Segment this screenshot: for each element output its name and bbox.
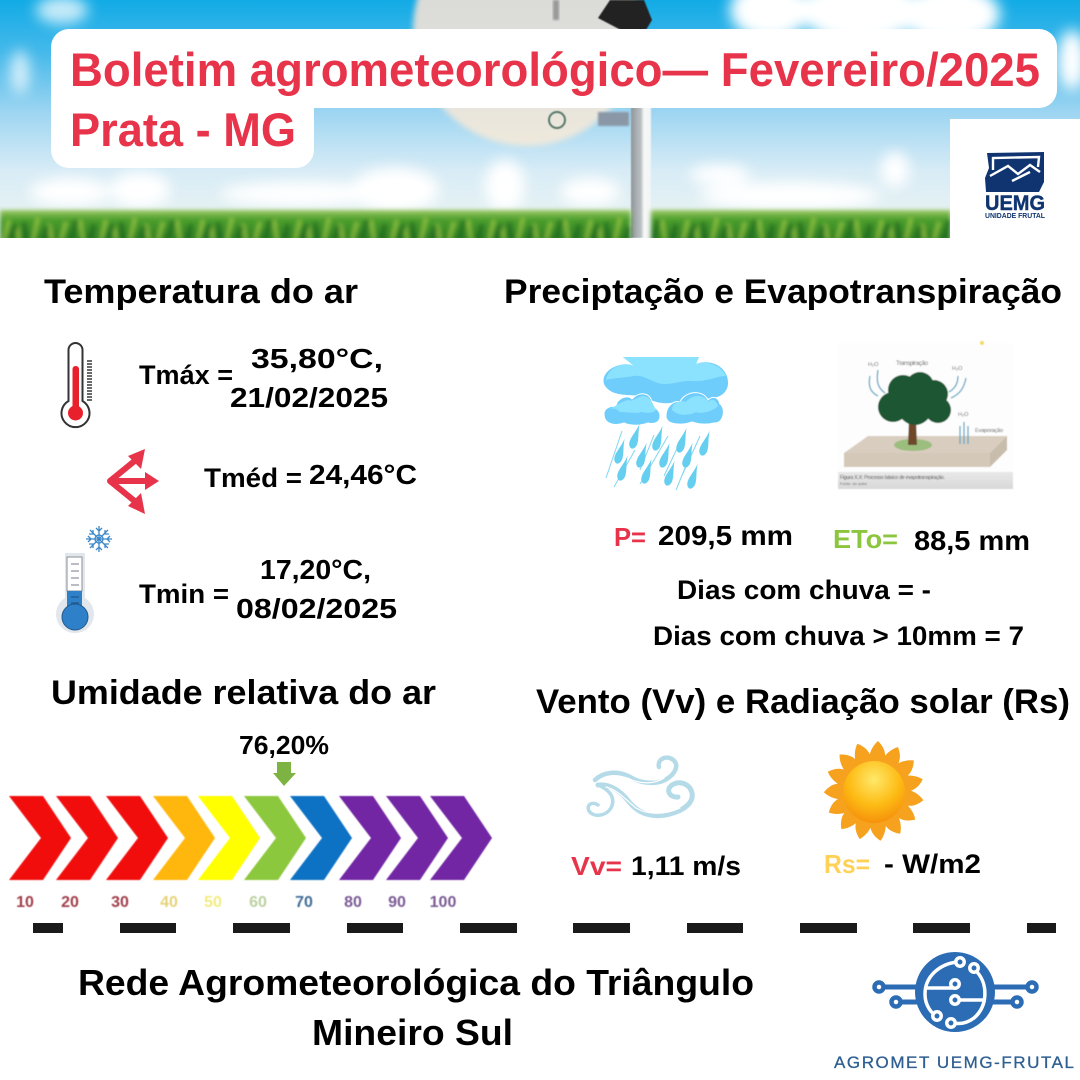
title xyxy=(51,29,1057,168)
text: days with rain: Dias com chuva = - xyxy=(677,575,931,605)
chart: humidity chevron scale: 100 xyxy=(430,894,456,911)
icon: evapotranspiration diagram: Transpiração xyxy=(896,361,929,367)
icon: three red arrows xyxy=(110,449,159,514)
value: tmax: 21/02/2025 xyxy=(230,382,388,413)
chart: humidity chevron scale: 40 xyxy=(160,894,178,911)
value: tmin: 17,20°C, xyxy=(260,554,371,585)
icon: evapotranspiration diagram: Fonte: do autor xyxy=(840,481,868,486)
value: tmin xyxy=(236,554,397,624)
title: Boletim agrometeorológico— Fevereiro/2025 xyxy=(70,43,1040,96)
icon: snowflake xyxy=(86,526,112,552)
heading: vento e radiação solar: Vento (Vv) e Radiação solar (Rs) xyxy=(536,683,1070,721)
logo: UEMG Unidade Frutal: UNIDADE FRUTAL xyxy=(985,213,1046,220)
value: wind speed xyxy=(571,851,741,881)
heading: precipitação e evapotranspiração: Preciptação e Evapotranspiração xyxy=(504,273,1062,311)
icon: green down arrow xyxy=(273,762,296,786)
value: precipitation: 209,5 mm xyxy=(658,520,793,551)
value: tmax: 35,80°C, xyxy=(251,343,383,374)
icon: evapotranspiration diagram: Evaporação xyxy=(975,428,1003,434)
icon: wind xyxy=(588,758,692,816)
logo: Agromet UEMG-Frutal: AGROMET UEMG-FRUTAL xyxy=(834,1053,1074,1072)
text: days with rain over 10 mm: Dias com chuva > 10mm = 7 xyxy=(653,621,1024,651)
chart: humidity chevron scale: 30 xyxy=(111,894,129,911)
chart: humidity chevron scale: 10 xyxy=(16,894,34,911)
heading: umidade relativa do ar: Umidade relativa do ar xyxy=(51,674,436,712)
icon: evapotranspiration diagram: H₂O xyxy=(952,366,963,372)
footer: network name: Rede Agrometeorológica do Triângulo xyxy=(78,962,754,1003)
value: relative humidity: 76,20% xyxy=(239,730,329,760)
icon: hot thermometer xyxy=(62,343,92,427)
icon: cold thermometer xyxy=(56,553,94,633)
value: solar radiation: - W/m2 xyxy=(884,849,981,879)
chart: humidity chevron scale: 90 xyxy=(388,894,406,911)
logo: UEMG Unidade Frutal: UEMG xyxy=(985,192,1045,215)
label: tmed: Tméd = xyxy=(204,463,302,493)
value: wind speed: Vv= xyxy=(571,851,622,881)
value: precipitation: P= xyxy=(614,522,646,552)
value: tmin: 08/02/2025 xyxy=(236,593,397,624)
value: evapotranspiration xyxy=(833,524,1030,556)
heading: temperatura do ar: Temperatura do ar xyxy=(44,273,358,311)
title: Prata - MG xyxy=(70,103,296,156)
icon: sun xyxy=(823,741,925,842)
label: tmin: Tmin = xyxy=(139,579,229,609)
value: tmax xyxy=(230,343,388,413)
value: evapotranspiration: 88,5 mm xyxy=(914,525,1030,556)
logo: Agromet UEMG-Frutal xyxy=(834,952,1074,1072)
value: wind speed: 1,11 m/s xyxy=(631,851,741,881)
chart: humidity chevron scale: 60 xyxy=(249,894,267,911)
label: tmax: Tmáx = xyxy=(139,360,233,390)
value: precipitation xyxy=(614,520,793,552)
icon: evapotranspiration diagram xyxy=(838,341,1013,489)
icon: evapotranspiration diagram: H₂O xyxy=(868,362,879,368)
icon: evapotranspiration diagram: H₂O xyxy=(958,412,969,418)
icon: rain cloud xyxy=(604,357,728,490)
chart: humidity chevron scale: 70 xyxy=(295,894,313,911)
chart: humidity chevron scale: 20 xyxy=(61,894,79,911)
value: tmed: 24,46°C xyxy=(309,459,417,490)
chart: humidity chevron scale xyxy=(9,796,492,911)
logo: UEMG Unidade Frutal xyxy=(950,119,1080,238)
chart: humidity chevron scale: 80 xyxy=(344,894,362,911)
value: evapotranspiration: ETo= xyxy=(833,524,898,554)
value: solar radiation xyxy=(824,849,981,879)
chart: humidity chevron scale: 50 xyxy=(204,894,222,911)
header photo: weather station over sky and grass xyxy=(0,0,1080,242)
value: solar radiation: Rs= xyxy=(824,849,870,879)
footer: network name: Mineiro Sul xyxy=(312,1012,513,1053)
icon: evapotranspiration diagram: Figura X.X: Processo básico de evapotranspiração. xyxy=(840,475,945,481)
footer: network name xyxy=(78,962,754,1053)
